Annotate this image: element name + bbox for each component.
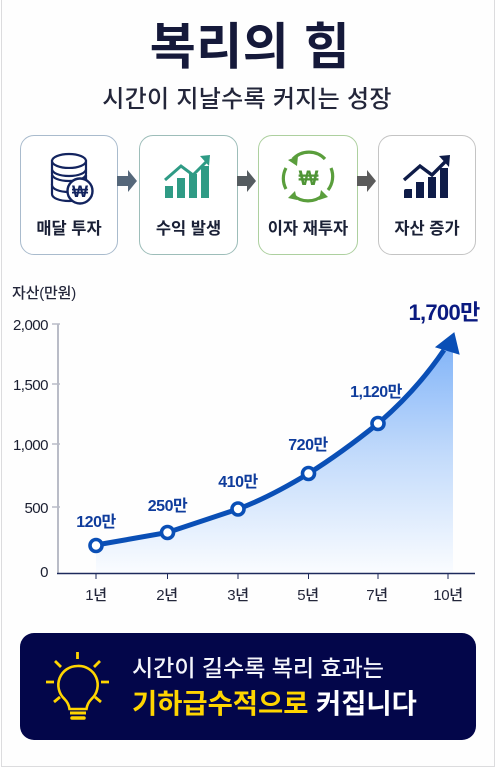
y axis labels: 2,000: [13, 317, 48, 334]
banner line one: 시간이 길수록 복리 효과는: [132, 655, 384, 681]
icon: coin stack with won: [50, 152, 94, 205]
callout banner: [20, 633, 476, 740]
icon: green recycling won: ₩: [299, 167, 319, 190]
y axis labels: 1,500: [13, 377, 48, 394]
chart: asset growth curve: [12, 285, 480, 604]
data labels: 720만: [288, 436, 328, 454]
arrow: [117, 170, 137, 192]
data labels: 120만: [76, 513, 116, 531]
label: 이자 재투자: [268, 220, 348, 238]
label: 매달 투자: [36, 220, 102, 238]
curve arrowhead: [436, 333, 459, 354]
x axis labels: 1년: [85, 587, 107, 604]
panel: asset growth: [378, 135, 476, 255]
icon: light bulb: [46, 652, 109, 720]
data labels: 1,120만: [350, 383, 403, 401]
y axis labels: 0: [40, 564, 48, 581]
label: 자산 증가: [394, 220, 460, 238]
data labels: 250만: [148, 497, 188, 515]
y axis labels: [13, 317, 48, 581]
title: 복리의 힘: [150, 19, 350, 75]
y axis labels: 1,000: [13, 437, 48, 454]
x axis labels: [85, 587, 463, 604]
axes: [52, 324, 475, 579]
area fill under curve: [96, 340, 453, 573]
panel: monthly investment: [20, 135, 118, 255]
y axis labels: 500: [24, 500, 48, 517]
label: 수익 발생: [156, 220, 221, 238]
arrow: [237, 170, 256, 192]
y axis title: 자산(만원): [12, 285, 76, 302]
banner line two: 기하급수적으로 커집니다: [132, 688, 417, 719]
x axis labels: 10년: [433, 587, 463, 604]
data labels: [76, 383, 403, 531]
x axis labels: 5년: [297, 587, 319, 604]
final value label: 1,700만: [408, 300, 480, 325]
panel: interest reinvestment: [258, 135, 358, 255]
arrow: [357, 170, 376, 192]
icon: teal growth chart: [164, 155, 210, 198]
panel: profit generated: [139, 135, 238, 255]
x axis labels: 2년: [156, 587, 178, 604]
icon: navy growth chart: [402, 155, 450, 198]
icon: green recycling won: [282, 150, 334, 202]
data points: [90, 418, 384, 552]
x axis labels: 7년: [366, 587, 388, 604]
icon: coin stack with won: ₩: [72, 182, 89, 201]
data labels: 410만: [218, 473, 258, 491]
subtitle: 시간이 지날수록 커지는 성장: [102, 86, 392, 113]
growth curve line: [96, 350, 444, 545]
x axis labels: 3년: [227, 587, 249, 604]
